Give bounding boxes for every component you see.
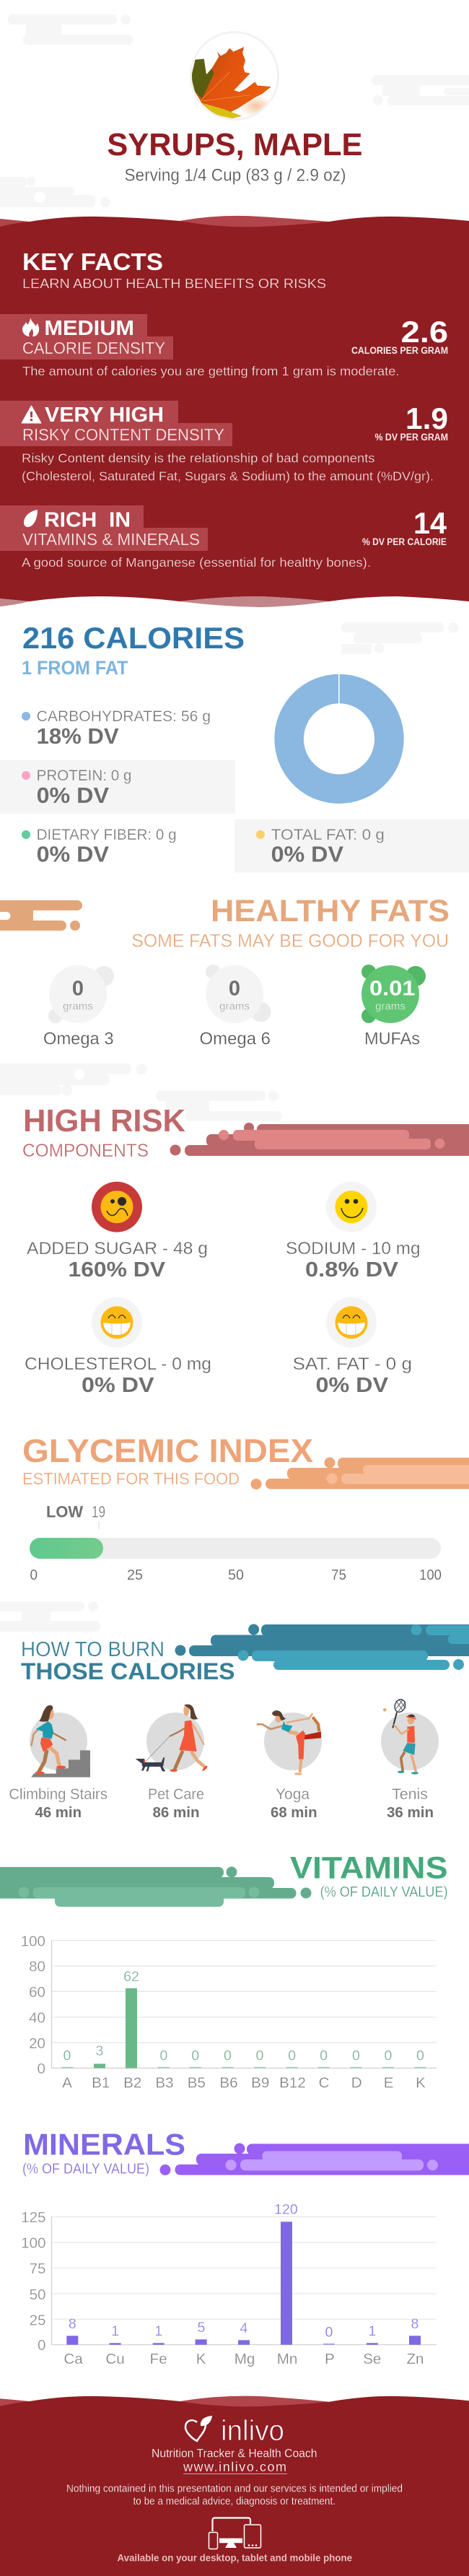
label: vitamins and minerals: VITAMINS & MINERALS xyxy=(22,530,200,549)
icon: grinning face xyxy=(326,1297,377,1348)
chart: vitamins bar chart: 0 xyxy=(38,2061,45,2077)
chart: vitamins bar chart: 60 xyxy=(29,1984,45,2001)
panel: key facts xyxy=(0,216,469,607)
stat: omega 3: 0 xyxy=(72,978,84,1001)
subheading: from fat: 1 FROM FAT xyxy=(22,657,128,679)
heading: how to burn: HOW TO BURN xyxy=(21,1638,165,1661)
stat: mufas: 0.01 xyxy=(369,978,416,1001)
chart: minerals bar chart: 8 xyxy=(69,2316,76,2332)
chart: minerals bar chart: 100 xyxy=(21,2235,46,2251)
risk item: saturated fat: 0% DV xyxy=(316,1374,389,1397)
chart: minerals bar chart: 5 xyxy=(198,2320,206,2336)
icon: grinning face xyxy=(92,1297,142,1348)
gauge: glycemic value: 0 xyxy=(30,1567,38,1583)
chart: vitamins bar chart: 0 xyxy=(288,2048,296,2064)
value: 2.6: 2.6 xyxy=(401,315,448,349)
risk item: sodium xyxy=(286,1182,420,1282)
icon: woman climbing stairs xyxy=(31,1705,90,1777)
gauge: glycemic value: 50 xyxy=(228,1567,244,1583)
value: 1.9: 1.9 xyxy=(406,401,448,435)
nutrient: protein: PROTEIN: 0 g xyxy=(37,767,131,784)
chart: vitamins bar chart xyxy=(21,1933,437,2092)
activity: climbing stairs: Climbing Stairs xyxy=(9,1786,108,1803)
nutrient: protein: 0% DV xyxy=(37,783,110,808)
chart: vitamins bar chart: C xyxy=(319,2075,330,2092)
icon: heart with leaf xyxy=(185,2416,212,2441)
background cloud: calories xyxy=(341,622,458,654)
activity: tennis: 36 min xyxy=(387,1805,434,1821)
disclaimer: Nothing contained in this presentation and our services is intended or implied xyxy=(66,2484,403,2495)
risk item: added sugar: 160% DV xyxy=(68,1258,166,1282)
subheading: percent of daily value: (% OF DAILY VALUE) xyxy=(320,1884,448,1900)
heading: glycemic index: GLYCEMIC INDEX xyxy=(22,1432,313,1469)
chart: minerals bar chart: 1 xyxy=(111,2323,119,2339)
chart: vitamins bar chart: 0 xyxy=(416,2048,424,2064)
title: SYRUPS, MAPLE xyxy=(107,128,362,162)
icon: devices xyxy=(209,2518,261,2549)
icon: leaf xyxy=(24,510,38,527)
chart: minerals bar chart: Mg xyxy=(234,2351,255,2367)
label: risky content density: RISKY CONTENT DENSITY xyxy=(22,425,224,444)
stat: omega 6 xyxy=(199,965,271,1049)
chart: vitamins bar chart: K xyxy=(416,2075,426,2092)
value: 14: 14 xyxy=(413,506,447,540)
disclaimer xyxy=(66,2484,403,2507)
nutrient: total fat: 0% DV xyxy=(271,843,344,867)
label: very high: VERY HIGH xyxy=(45,404,164,427)
chart: minerals bar chart: Cu xyxy=(105,2351,125,2367)
stat: mufas xyxy=(361,965,426,1049)
chart: vitamins bar chart: 100 xyxy=(21,1933,45,1949)
chart: vitamins bar chart: D xyxy=(351,2075,362,2092)
chart: vitamins bar chart: 0 xyxy=(159,2048,167,2064)
chart: minerals bar chart: 25 xyxy=(30,2312,46,2329)
activity: tennis: Tenis xyxy=(392,1786,428,1803)
activity: tennis xyxy=(381,1698,439,1821)
fact: risky content density xyxy=(0,401,448,484)
top wave xyxy=(0,216,469,607)
panel: vitamins xyxy=(0,1851,448,2092)
description xyxy=(22,451,434,484)
background cloud: burn xyxy=(0,1601,100,1632)
chart: minerals bar chart: 0 xyxy=(38,2337,46,2354)
chart: minerals bar chart: K xyxy=(196,2351,206,2367)
chart: vitamins bar chart: B5 xyxy=(188,2075,206,2092)
label: medium: MEDIUM xyxy=(44,317,134,340)
chart: vitamins bar chart: B6 xyxy=(219,2075,238,2092)
chart: vitamins bar chart: 0 xyxy=(352,2048,360,2064)
chart: vitamins bar chart: 62 xyxy=(123,1969,139,1985)
chart: vitamins bar chart: 20 xyxy=(29,2035,45,2052)
icon: woman doing yoga xyxy=(257,1710,321,1775)
icon: tennis player xyxy=(383,1698,418,1775)
background cloud: high risk left xyxy=(0,1063,147,1096)
stat: omega 6: 0 xyxy=(229,978,240,1001)
stat: omega 6: grams xyxy=(219,1001,250,1013)
chart: minerals bar chart: Ca xyxy=(63,2351,83,2367)
panel: glycemic index xyxy=(22,1432,469,1583)
stat: omega 3 xyxy=(43,965,114,1049)
chart: minerals bar chart: 50 xyxy=(30,2286,46,2303)
chart: minerals bar chart: Se xyxy=(363,2351,381,2367)
chart: vitamins bar chart: 3 xyxy=(96,2043,104,2059)
chart: vitamins bar chart: 0 xyxy=(385,2048,393,2064)
heading: 216 calories: 216 CALORIES xyxy=(22,621,245,655)
panel: high risk components xyxy=(22,1104,469,1397)
stat: omega 3: grams xyxy=(63,1001,93,1013)
activity: yoga: Yoga xyxy=(276,1786,310,1803)
chart: vitamins bar chart: E xyxy=(384,2075,393,2092)
gauge: glycemic value xyxy=(30,1503,442,1583)
chart: calorie donut xyxy=(289,674,389,789)
unit: calories per gram: CALORIES PER GRAM xyxy=(351,345,448,356)
logo: inlivo: inlivo xyxy=(221,2415,284,2447)
risk item: added sugar xyxy=(27,1182,208,1282)
panel: footer xyxy=(0,2396,469,2576)
heading: high risk: HIGH RISK xyxy=(23,1104,186,1139)
gauge: glycemic value: 19 xyxy=(92,1503,105,1520)
chart: vitamins bar chart: B9 xyxy=(251,2075,269,2092)
activity: pet care xyxy=(136,1705,208,1821)
chart: vitamins bar chart: 0 xyxy=(256,2048,264,2064)
icon: smiling face xyxy=(326,1182,377,1232)
background cloud: top left xyxy=(8,14,133,45)
decoration: high risk ribbon xyxy=(170,1123,469,1156)
background cloud: high risk right xyxy=(156,1091,281,1121)
chart: minerals bar chart: 4 xyxy=(240,2320,248,2336)
decoration: burn ribbon xyxy=(175,1624,469,1670)
gauge: glycemic value: 75 xyxy=(331,1567,346,1583)
decoration: minerals ribbon xyxy=(160,2143,469,2175)
chart: minerals bar chart: 75 xyxy=(30,2260,46,2277)
background cloud: top right xyxy=(372,75,469,105)
stat: mufas: grams xyxy=(375,1001,406,1013)
chart: minerals bar chart: 125 xyxy=(21,2209,46,2226)
gauge: glycemic value: 25 xyxy=(127,1567,143,1583)
logo: inlivo xyxy=(185,2415,284,2447)
activity: climbing stairs xyxy=(9,1705,108,1821)
label: calorie density: CALORIE DENSITY xyxy=(22,339,165,357)
chart: vitamins bar chart: B1 xyxy=(92,2075,110,2092)
unit: % dv per gram: % DV PER GRAM xyxy=(375,432,448,443)
panel: calories xyxy=(0,621,469,873)
description: A good source of Manganese (essential for healthy bones). xyxy=(22,555,371,570)
activity: climbing stairs: 46 min xyxy=(35,1805,82,1821)
serving size: Serving 1/4 Cup (83 g / 2.9 oz) xyxy=(124,166,346,185)
heading: vitamins: VITAMINS xyxy=(290,1851,448,1886)
nutrient: total fat: TOTAL FAT: 0 g xyxy=(271,827,385,843)
disclaimer: to be a medical advice, diagnosis or treatment. xyxy=(133,2496,336,2507)
chart: vitamins bar chart: 0 xyxy=(320,2048,328,2064)
nutrient: carbohydrates xyxy=(22,708,211,749)
label: rich in: RICH IN xyxy=(44,508,131,531)
description: Risky Content density is the relationship of bad components xyxy=(22,451,375,466)
risk item: saturated fat xyxy=(293,1297,412,1397)
unit: % dv per calorie: % DV PER CALORIE xyxy=(362,536,447,547)
nutrient: carbohydrates: CARBOHYDRATES: 56 g xyxy=(37,708,211,725)
chart: vitamins bar chart: B12 xyxy=(279,2075,306,2092)
chart: minerals bar chart: Fe xyxy=(150,2351,167,2367)
description: (Cholesterol, Saturated Fat, Sugars & Sodium) to the amount (%DV/gr). xyxy=(22,469,434,484)
icon: warning triangle xyxy=(22,406,41,423)
chart: vitamins bar chart: 0 xyxy=(224,2048,232,2064)
risk item: sodium: SODIUM - 10 mg xyxy=(286,1239,420,1258)
subheading: estimated: ESTIMATED FOR THIS FOOD xyxy=(22,1469,240,1488)
activity: pet care: 86 min xyxy=(153,1805,199,1821)
chart: minerals bar chart: 1 xyxy=(154,2323,162,2339)
risk item: added sugar: ADDED SUGAR - 48 g xyxy=(27,1239,208,1258)
icon: woman walking dog xyxy=(136,1705,208,1772)
chart: minerals bar chart: Mn xyxy=(277,2351,297,2367)
gauge: glycemic value: LOW xyxy=(46,1503,83,1520)
nutrient: carbohydrates: 18% DV xyxy=(37,724,119,749)
fact: rich in vitamins and minerals xyxy=(0,505,447,570)
icon: sad face xyxy=(92,1182,142,1232)
chart: minerals bar chart: 120 xyxy=(274,2202,298,2218)
chart: vitamins bar chart: 80 xyxy=(29,1958,45,1975)
chart: minerals bar chart xyxy=(21,2202,437,2367)
risk item: saturated fat: SAT. FAT - 0 g xyxy=(293,1354,412,1374)
chart: minerals bar chart: 1 xyxy=(368,2323,376,2339)
chart: minerals bar chart: 0 xyxy=(325,2325,333,2341)
fact: calorie density xyxy=(0,314,448,378)
gauge: glycemic value: 100 xyxy=(419,1567,442,1583)
website link: www.inlivo.com xyxy=(183,2460,286,2474)
stat: omega 3: Omega 3 xyxy=(43,1030,114,1049)
chart: minerals bar chart: 8 xyxy=(411,2316,419,2332)
icon: maple leaf in circle xyxy=(190,32,279,120)
chart: vitamins bar chart: 0 xyxy=(191,2048,199,2064)
stat: omega 6: Omega 6 xyxy=(199,1030,271,1049)
subheading: components: COMPONENTS xyxy=(22,1141,149,1161)
chart: minerals bar chart: Zn xyxy=(406,2351,424,2367)
chart: vitamins bar chart: B2 xyxy=(123,2075,141,2092)
risk item: sodium: 0.8% DV xyxy=(305,1258,399,1282)
nutrient: dietary fiber: 0% DV xyxy=(37,843,110,867)
chart: minerals bar chart: P xyxy=(325,2351,335,2367)
nutrient: total fat xyxy=(234,819,469,873)
nutrient: protein xyxy=(0,760,235,814)
heading: those calories: THOSE CALORIES xyxy=(21,1658,235,1684)
subheading: percent of daily value: (% OF DAILY VALUE) xyxy=(22,2162,149,2177)
decoration: glycemic ribbon xyxy=(251,1457,469,1489)
activity: pet care: Pet Care xyxy=(148,1786,204,1803)
decoration: vitamins ribbon xyxy=(0,1867,312,1907)
decoration: healthy fats ribbon xyxy=(0,900,82,931)
nutrient: dietary fiber: DIETARY FIBER: 0 g xyxy=(37,827,177,843)
heading: healthy fats: HEALTHY FATS xyxy=(211,894,450,928)
risk item: cholesterol xyxy=(25,1297,211,1397)
description: The amount of calories you are getting from 1 gram is moderate. xyxy=(22,364,400,378)
activity: yoga: 68 min xyxy=(271,1805,317,1821)
chart: vitamins bar chart: 0 xyxy=(63,2048,71,2064)
subheading: key facts: LEARN ABOUT HEALTH BENEFITS OR RISKS xyxy=(22,277,326,291)
header: food image and title xyxy=(107,32,362,185)
risk item: cholesterol: CHOLESTEROL - 0 mg xyxy=(25,1354,211,1374)
chart: vitamins bar chart: A xyxy=(62,2075,72,2092)
nutrient: dietary fiber xyxy=(22,827,177,867)
panel: how to burn those calories xyxy=(9,1624,469,1821)
heading: key facts: KEY FACTS xyxy=(22,249,163,276)
panel: healthy fats xyxy=(0,894,450,1049)
panel: minerals xyxy=(21,2128,469,2367)
icon: flame xyxy=(22,318,39,336)
background cloud: left xyxy=(0,176,110,207)
footer wave xyxy=(0,2396,469,2576)
heading: minerals: MINERALS xyxy=(23,2128,185,2162)
availability note: Available on your desktop, tablet and mobile phone xyxy=(117,2552,352,2564)
tagline: Nutrition Tracker & Health Coach xyxy=(152,2447,317,2460)
risk item: cholesterol: 0% DV xyxy=(82,1374,154,1397)
subheading: healthy fats: SOME FATS MAY BE GOOD FOR YOU xyxy=(131,931,449,952)
activity: yoga xyxy=(257,1710,322,1821)
stat: mufas: MUFAs xyxy=(364,1030,420,1049)
chart: vitamins bar chart: B3 xyxy=(155,2075,174,2092)
chart: vitamins bar chart: 40 xyxy=(29,2010,45,2026)
